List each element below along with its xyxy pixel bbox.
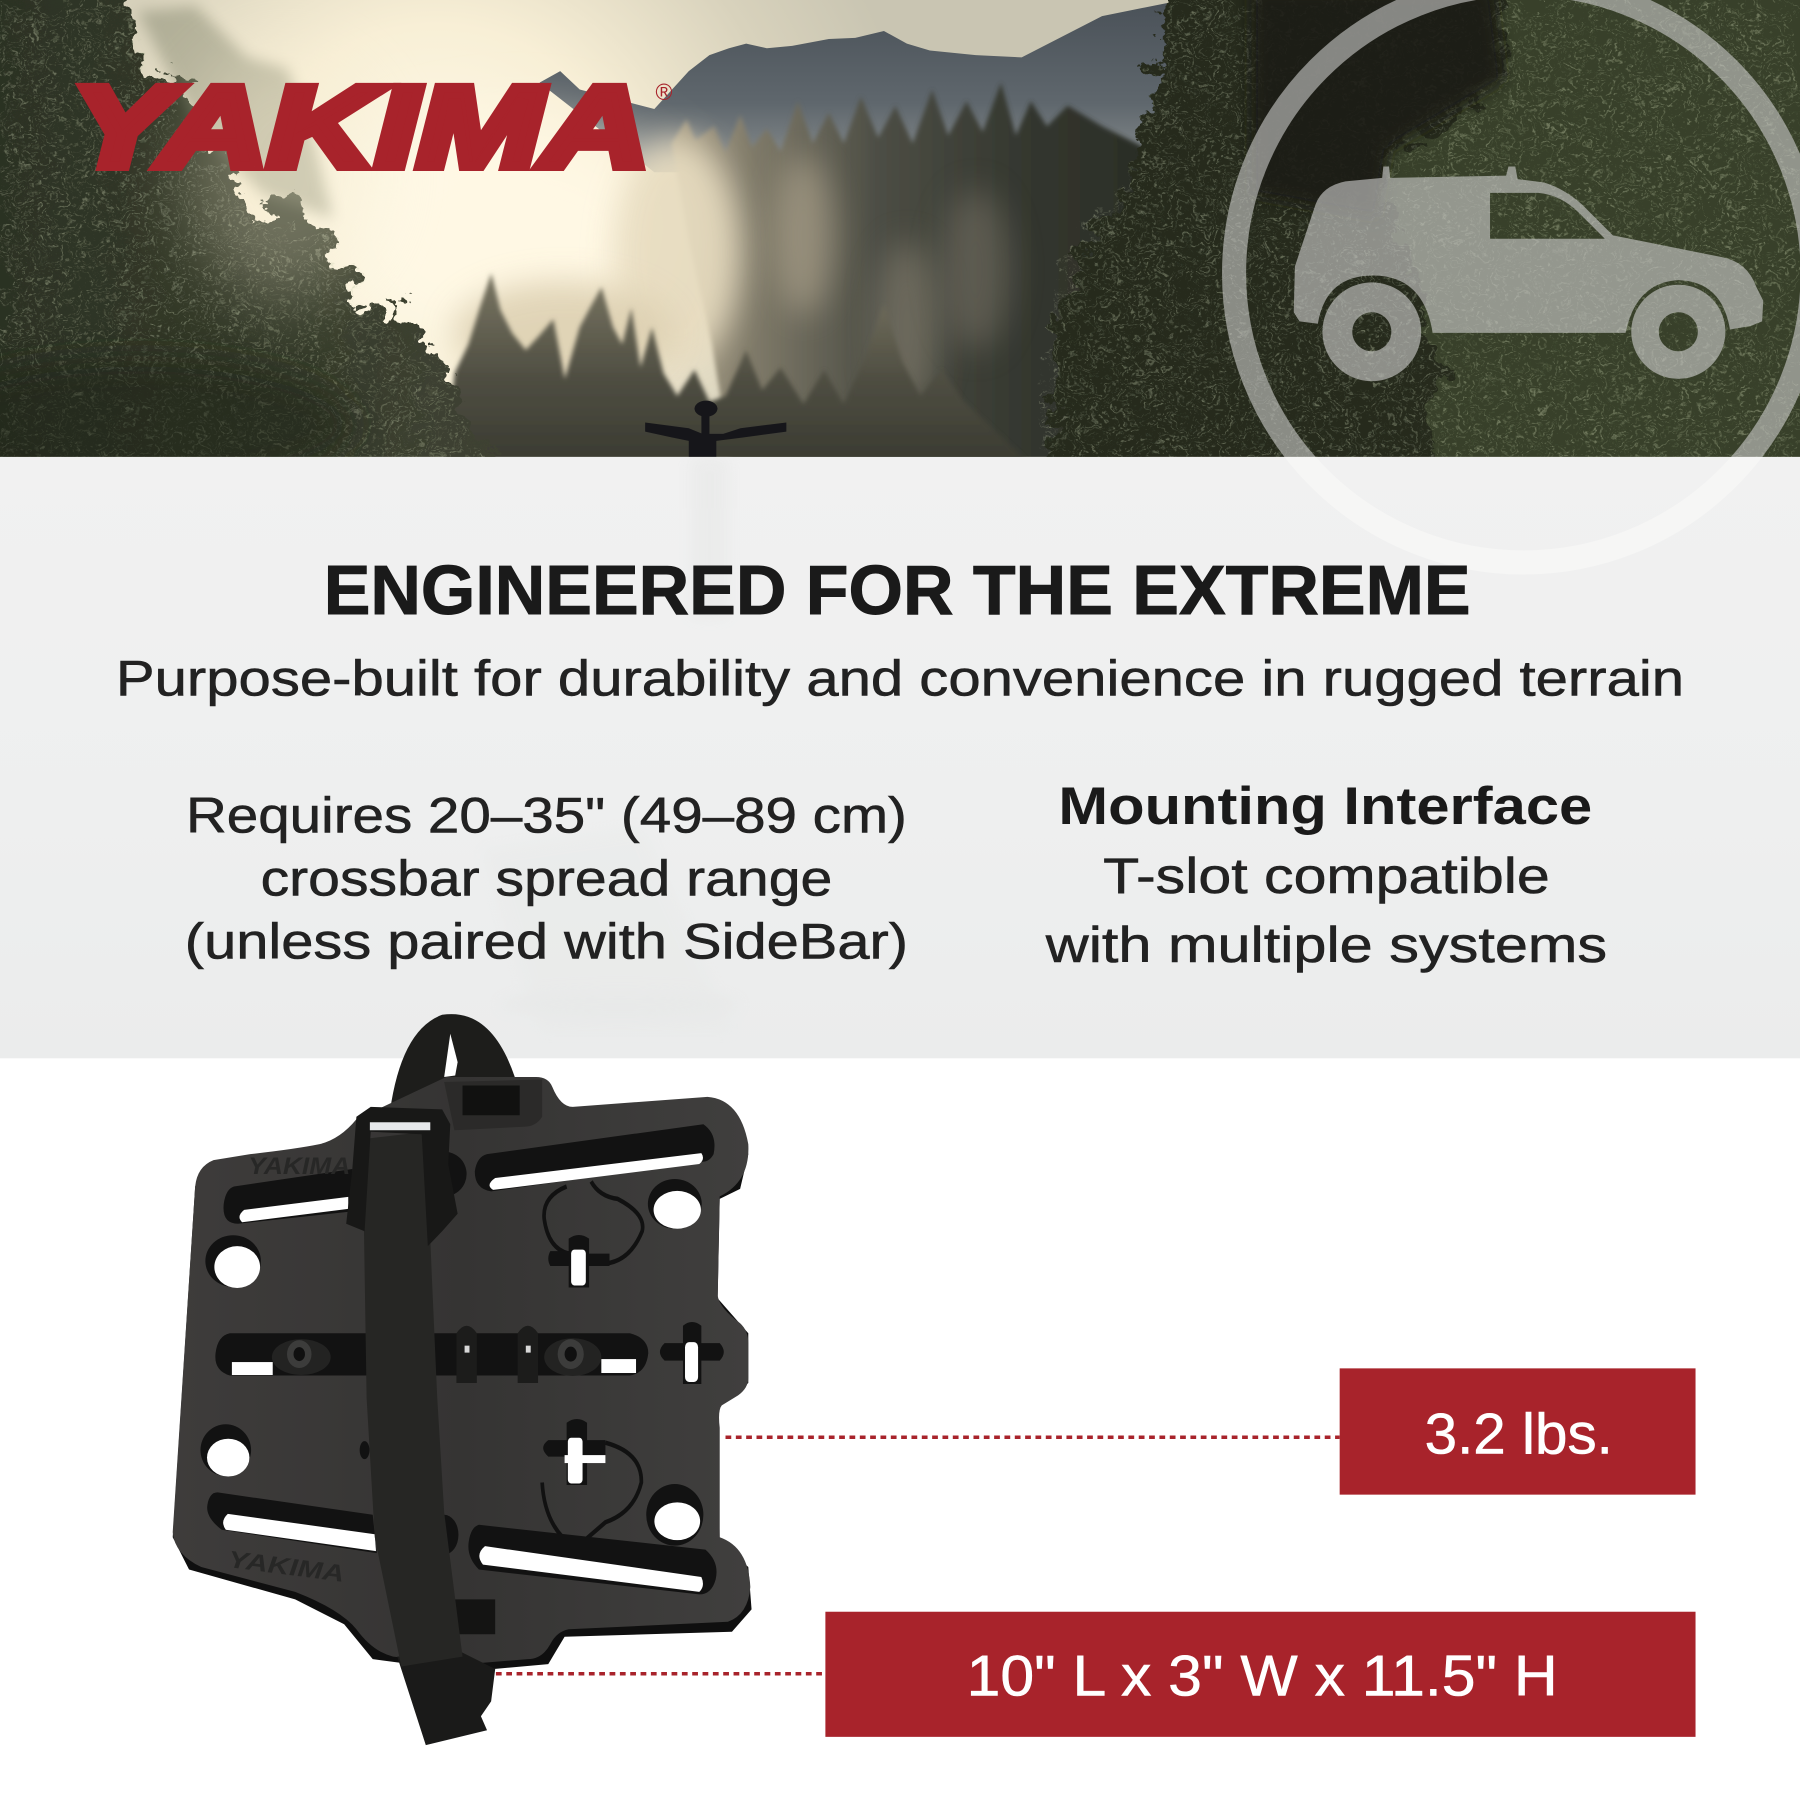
embossed logos: YAKIMA (227, 1545, 345, 1587)
dotted leader to dimensions (496, 1672, 825, 1675)
vertical webbing strap (363, 1132, 463, 1667)
plate body (173, 1077, 750, 1664)
sun haze over tree edge (184, 46, 390, 298)
Yakima logo (71, 63, 672, 191)
left tree mass (0, 0, 505, 494)
grey text panel (0, 457, 1800, 1058)
lower keyhole (542, 1419, 641, 1538)
logo wordmark: YAKIMA (71, 63, 650, 191)
product: mounting plate with strap (173, 1014, 752, 1745)
strap loop gap (444, 1034, 458, 1077)
callout: weight (1340, 1368, 1696, 1495)
text block: crossbar spread: (unless paired with SideBar) (185, 913, 908, 970)
text block: mounting interface: with multiple systems (1045, 916, 1607, 973)
heading: ENGINEERED FOR THE EXTREME (324, 551, 1471, 629)
top tab and strap slot (444, 1079, 542, 1130)
text block: crossbar spread: Requires 20–35" (49–89 cm) (186, 786, 907, 843)
rising mist (362, 132, 1010, 413)
sky with sun glow (0, 0, 1800, 457)
dark shadow lower left (0, 340, 364, 457)
text block: mounting interface (1045, 777, 1607, 973)
text block: mounting interface: T-slot compatible (1103, 847, 1550, 904)
callout: weight: 3.2 lbs. (1425, 1402, 1613, 1466)
registered mark: ® (655, 79, 672, 105)
rear wheel (1322, 282, 1421, 381)
dark shadow gap in right trees (1251, 0, 1504, 218)
misty mid-distance forest (672, 83, 1148, 482)
front wheel (1631, 285, 1725, 379)
text block: crossbar spread: crossbar spread range (261, 849, 832, 906)
distant mountains (540, 0, 1194, 172)
lighter foliage on the right trees (1389, 0, 1800, 494)
embossed logos (227, 1152, 350, 1587)
text block: crossbar spread (185, 786, 908, 970)
panel background (0, 457, 1800, 1058)
strap loop at top (390, 1014, 515, 1114)
subheading: Purpose-built for durability and convenience in rugged terrain (116, 650, 1684, 707)
callout: dimensions: 10" L x 3" W x 11.5" H (967, 1645, 1558, 1709)
slot top right (475, 1124, 714, 1191)
SUV icon (1294, 166, 1763, 381)
circular vehicle badge (1234, 0, 1800, 562)
embossed logos: YAKIMA (248, 1152, 350, 1179)
small cross slot (660, 1322, 724, 1384)
foreground conifers in the valley (444, 272, 1024, 457)
tree masses with rough foliage edges (0, 0, 1800, 494)
plate underside shadow (173, 1082, 752, 1672)
upper keyhole (544, 1181, 643, 1287)
slot top left (224, 1169, 352, 1224)
round holes (200, 1152, 703, 1555)
hero forest photo banner (0, 0, 1800, 494)
badge ring (1234, 0, 1800, 562)
foliage texture (0, 0, 1800, 482)
callout: dimensions (825, 1612, 1696, 1737)
right tree mass (1039, 0, 1800, 494)
slot bottom left (207, 1492, 377, 1553)
strap lower end (397, 1652, 495, 1745)
bike handlebars silhouette (645, 401, 786, 457)
faded photo ghost (482, 457, 740, 1033)
slot bottom right (468, 1525, 717, 1594)
dotted leader to weight (726, 1436, 1340, 1439)
lower strap tab (452, 1599, 495, 1634)
buckle (346, 1107, 458, 1246)
text block: mounting interface: Mounting Interface (1058, 777, 1592, 836)
centre slot with bolts (215, 1326, 648, 1383)
thin sunlit leaves top left (138, 6, 333, 218)
